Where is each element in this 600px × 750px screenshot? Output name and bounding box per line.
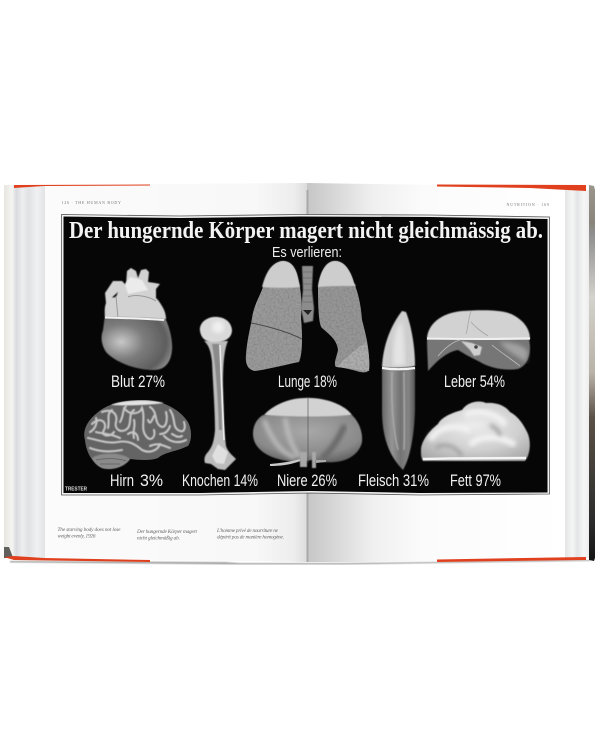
caption: German: Der hungernde Körper magert: [136, 529, 198, 535]
label: Leber: Leber 54%: [444, 373, 505, 391]
maker mark: TRESTER: [65, 486, 87, 492]
organ: liver: [427, 310, 530, 371]
caption: German: [136, 529, 198, 542]
label: Niere: Niere 26%: [277, 472, 337, 490]
trachea: [301, 266, 314, 323]
caption: English: [58, 527, 121, 540]
organ: kidney: [253, 398, 362, 468]
poster background: [64, 216, 548, 493]
red edge: bottom left: [4, 556, 150, 562]
left page block: [4, 185, 45, 558]
left cover corner: [4, 547, 14, 560]
bottom shadow: [10, 560, 590, 564]
gutter line: [306, 190, 308, 562]
poster frame: [62, 214, 550, 495]
organ: brain: [84, 400, 191, 469]
caption: French: L'homme privé de nourriture ne: [216, 528, 279, 534]
left lung: [246, 261, 302, 371]
caption: German: nicht gleichmäßig ab.: [137, 534, 180, 542]
caption: French: [216, 528, 284, 540]
running head: right: NUTRITION · 169: [506, 202, 550, 207]
organ: muscle: [382, 311, 415, 470]
organ: lungs: [246, 261, 369, 372]
organ: fat: [421, 401, 530, 461]
right cover edge: [589, 185, 595, 561]
running head: left: 126 · THE HUMAN BODY: [62, 200, 122, 205]
right lung: [318, 261, 369, 372]
book: [4, 183, 595, 564]
label: Lunge: Lunge 18%: [278, 373, 337, 391]
label: Hirn: [110, 472, 163, 490]
left page: [45, 183, 307, 562]
caption: English: The starving body does not lose: [58, 527, 121, 533]
label: Fett: Fett 97%: [450, 472, 501, 490]
label: Hirn: 3%: [140, 472, 163, 490]
label: Hirn: Hirn: [110, 472, 134, 490]
subtitle: Es verlieren:: [272, 244, 342, 261]
label: Knochen: Knochen 14%: [182, 472, 258, 490]
red edge: bottom right: [437, 557, 586, 562]
right page: [307, 183, 565, 562]
organ: bone: [200, 317, 236, 470]
label: Blut: Blut 27%: [111, 373, 165, 391]
red edge: top right: [437, 184, 586, 191]
right page block: [565, 190, 590, 558]
panel: poster: [62, 214, 550, 495]
red edge: top left: [14, 184, 150, 188]
organ: heart: [102, 268, 172, 370]
caption: English: weight evenly, 1926: [58, 534, 96, 540]
caption: French: dépérit pas de manière homogène.: [217, 534, 284, 540]
gutter line across poster: [308, 397, 309, 463]
label: Fleisch: Fleisch 31%: [358, 472, 429, 490]
